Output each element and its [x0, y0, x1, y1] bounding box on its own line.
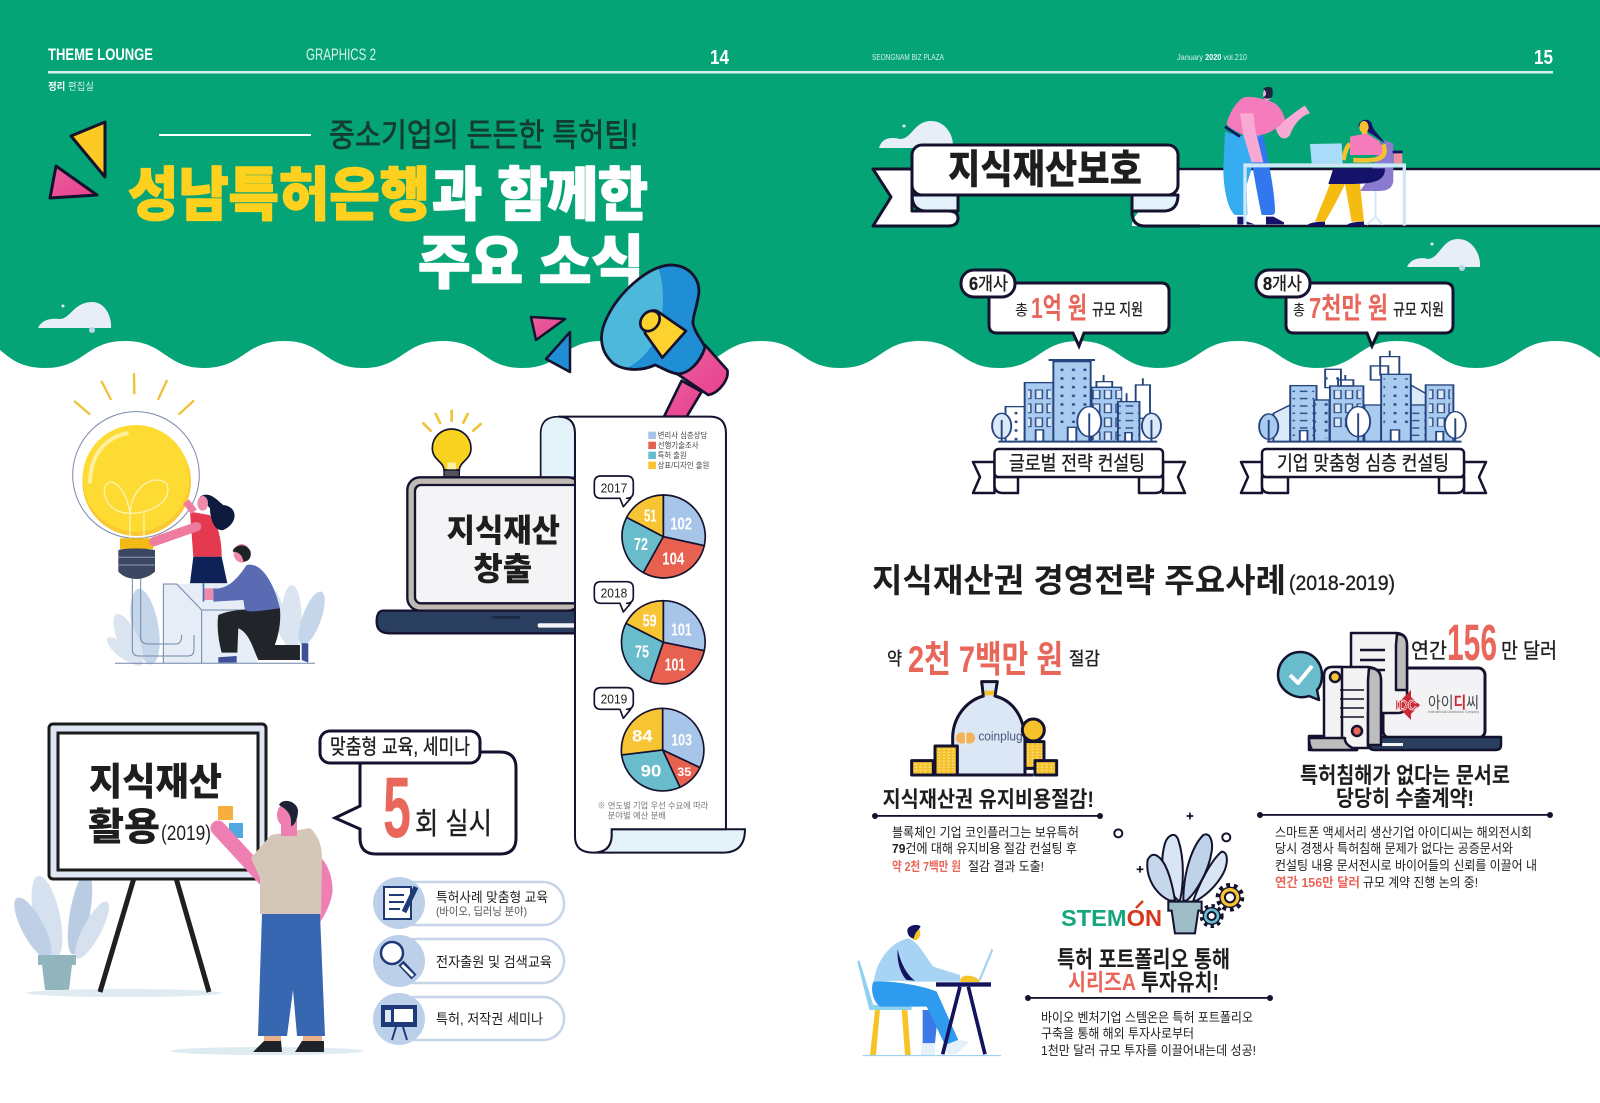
- export value headline: [1411, 614, 1557, 671]
- page header bar: 15: [1534, 47, 1553, 69]
- illustration: two people at desk: [1223, 87, 1406, 226]
- support callout: 6 companies: 규모 지원: [1092, 301, 1143, 319]
- case title: 당당히 수출계약!: [1336, 786, 1474, 811]
- ribbon: IP protection: 지식재산보호: [948, 148, 1142, 192]
- case body: 당시 경쟁사 특허침해 문제가 없다는 공증문서와: [1275, 841, 1513, 856]
- pie chart 2018: 59: [643, 611, 657, 631]
- case body: 구축을 통해 해외 투자사로부터: [1041, 1026, 1194, 1041]
- title: 성남특허은행: [128, 163, 430, 228]
- callout: five sessions: 회 실시: [415, 808, 492, 841]
- ribbon: global strategy consulting: [973, 449, 1185, 493]
- IDC logo: 아이디씨: [1428, 694, 1479, 712]
- export value headline: 연간: [1411, 640, 1447, 663]
- cloud middle right: [1407, 239, 1480, 271]
- pie chart 2017: 2017: [601, 480, 627, 495]
- pie chart 2018: 2018: [601, 586, 627, 601]
- support callout: 8 companies: 7천만 원: [1309, 292, 1388, 325]
- divider: [872, 813, 1103, 819]
- section heading: key cases: 지식재산권 경영전략 주요사례: [872, 562, 1286, 599]
- savings headline: 절감: [1069, 649, 1100, 669]
- case title: [1300, 763, 1510, 811]
- icon: coin jar: [912, 682, 1057, 775]
- case title: 시리즈A: [1068, 969, 1136, 995]
- easel: [100, 878, 209, 992]
- panel: knowledge creation laptop and pie charts: [377, 411, 745, 853]
- case body: 1천만 달러 규모 투자를 이끌어내는데 성공!: [1041, 1043, 1256, 1058]
- case title: 특허침해가 없다는 문서로: [1300, 763, 1510, 788]
- cloud top right: [879, 121, 953, 148]
- ribbon: IP protection: [873, 145, 1600, 226]
- whiteboard text: 지식재산: [89, 762, 222, 804]
- panel: knowledge utilisation whiteboard: [7, 724, 564, 1055]
- pill: seminar: 특허, 저작권 세미나: [436, 1011, 543, 1027]
- case body: 절감 결과 도출!: [968, 859, 1044, 874]
- bulb rays: [75, 374, 193, 414]
- title: 중소기업의 든든한 특허팀!: [329, 117, 638, 153]
- chart legend: 상표/디자인 출원: [658, 460, 709, 470]
- case body: 79건에 대해 유지비용 절감 컨설팅 후: [892, 841, 1077, 856]
- whiteboard text: (2019): [161, 822, 211, 845]
- pie chart 2017: [594, 476, 705, 578]
- icon: documents and laptop: [1278, 633, 1501, 750]
- pill: e-filing education: 전자출원 및 검색교육: [436, 954, 552, 970]
- case body: 컨설팅 내용 문서전시로 바이어들의 신뢰를 이끌어 내: [1275, 858, 1537, 873]
- pie chart 2018: [594, 582, 705, 684]
- case body: [1275, 825, 1537, 890]
- green header background: [0, 0, 1600, 368]
- page header bar: January 2020 vol.210: [1177, 52, 1247, 62]
- pill: seminar: [373, 993, 564, 1045]
- case title: 지식재산권 유지비용절감!: [882, 787, 1094, 812]
- pill: custom education: (바이오, 딥러닝 분야): [436, 905, 527, 918]
- title: 주요 소식: [418, 231, 644, 296]
- support callout: 6 companies: 1억 원: [1031, 292, 1087, 325]
- page header bar: SEONGNAM BIZ PLAZA: [872, 53, 945, 62]
- STEMON logo: STEMON: [1061, 905, 1162, 931]
- case body: [892, 825, 1079, 874]
- title decoration triangles: [50, 122, 105, 198]
- chart footnote: 분야별 예산 분배: [608, 811, 666, 821]
- support callout: 8 companies: [1256, 270, 1453, 346]
- case body: 약 2천 7백만 원: [892, 859, 961, 874]
- icon: coin jar: coinplug: [978, 729, 1023, 744]
- title: [128, 117, 648, 296]
- callout: five sessions: 5: [383, 760, 411, 856]
- section heading: key cases: (2018-2019): [1289, 572, 1395, 595]
- pill: e-filing education: [373, 935, 564, 987]
- pie chart 2019: 35: [677, 765, 692, 779]
- savings headline: 2천 7백만 원: [908, 639, 1063, 680]
- export value headline: 156: [1447, 614, 1497, 671]
- case body: 블록체인 기업 코인플러그는 보유특허: [892, 825, 1079, 840]
- support callout: 6 companies: 6개사: [969, 274, 1008, 294]
- pie chart 2018: 75: [635, 641, 649, 661]
- case title: [1057, 946, 1230, 995]
- page header bar: 정리 편집실: [48, 81, 94, 93]
- presenter figure: [218, 801, 332, 1052]
- laptop text: 창출: [473, 551, 532, 587]
- case: coinplug: [872, 639, 1103, 874]
- pill: custom education: 특허사례 맞춤형 교육: [436, 890, 548, 905]
- chart legend: 선행기술조사: [658, 440, 699, 450]
- ribbon: tailored consulting: 기업 맞춤형 심층 컨설팅: [1277, 452, 1449, 475]
- chart legend: 변리사 심층상담: [658, 430, 708, 440]
- support callout: 8 companies: 8개사: [1263, 274, 1302, 294]
- page header bar: THEME LOUNGE: [48, 45, 153, 64]
- pie chart 2019: 103: [671, 731, 692, 750]
- support callout: 8 companies: 규모 지원: [1393, 301, 1444, 319]
- case body: 연간 156만 달러: [1275, 875, 1360, 890]
- icon: small bulb: [423, 411, 481, 478]
- man standing: [1223, 87, 1310, 224]
- chart legend: [648, 430, 709, 470]
- support callout: 8 companies: 총: [1293, 302, 1305, 319]
- plant: [7, 870, 115, 990]
- pill: custom education: [373, 877, 564, 929]
- laptop text: 지식재산: [447, 513, 560, 549]
- case title: 투자유치!: [1141, 969, 1219, 995]
- ribbon: tailored consulting: [1241, 449, 1486, 493]
- divider: [1025, 995, 1273, 1001]
- page header bar: 14: [710, 47, 730, 69]
- callout: five sessions: [320, 731, 516, 856]
- support callout: 6 companies: [961, 270, 1169, 346]
- divider: [1257, 812, 1553, 818]
- icon: city buildings left: [992, 360, 1161, 442]
- illustration: man working at laptop: [857, 925, 1001, 1056]
- IDC logo: [1395, 690, 1479, 720]
- pie chart 2017: 104: [662, 548, 685, 568]
- case: STEMON: [1025, 813, 1273, 1058]
- case body: 스마트폰 액세서리 생산기업 아이디씨는 해외전시회: [1275, 825, 1532, 840]
- chart legend: 특허 출원: [658, 450, 687, 460]
- IDC logo: IDC: [1395, 697, 1417, 714]
- pie chart 2019: [594, 688, 704, 791]
- page header bar: GRAPHICS 2: [306, 45, 376, 64]
- pie chart 2018: 101: [671, 620, 692, 640]
- whiteboard text: 활용: [88, 807, 160, 849]
- IDC logo: International Distribution Company: [1428, 709, 1479, 714]
- chart footnote: ※ 연도별 기업 우선 수요에 따라: [597, 801, 709, 811]
- cloud left: [38, 302, 111, 333]
- callout: five sessions: 맞춤형 교육, 세미나: [330, 736, 470, 759]
- case body: [1041, 1010, 1256, 1058]
- small triangles beside megaphone: [531, 317, 570, 372]
- support callout: 6 companies: 총: [1015, 302, 1028, 319]
- pie chart 2018: 101: [665, 655, 686, 675]
- icon: city buildings right: [1259, 351, 1466, 442]
- title: 과 함께한: [432, 163, 648, 228]
- icon: plant with gears: [1114, 813, 1241, 933]
- whiteboard text: [88, 762, 222, 849]
- laptop text: [447, 513, 560, 587]
- paper scroll: [558, 417, 745, 853]
- pie chart 2017: 102: [670, 513, 692, 533]
- chart footnote: [597, 801, 709, 821]
- laptop: [377, 417, 583, 633]
- pie chart 2019: 90: [641, 762, 661, 781]
- export value headline: 만 달러: [1501, 640, 1557, 663]
- illustration: light bulb with two people: [73, 374, 330, 670]
- case body: 바이오 벤처기업 스템온은 특허 포트폴리오: [1041, 1010, 1253, 1025]
- case: IDC: [1257, 614, 1557, 890]
- case body: 규모 계약 진행 논의 중!: [1363, 875, 1478, 890]
- savings headline: 약: [887, 649, 902, 669]
- woman seated: [1307, 120, 1403, 226]
- pie chart 2019: 84: [632, 726, 653, 745]
- case title: 특허 포트폴리오 통해: [1057, 946, 1230, 972]
- ribbon: global strategy consulting: 글로벌 전략 컨설팅: [1009, 452, 1145, 475]
- pie chart 2017: 51: [644, 505, 657, 525]
- page header bar: [48, 45, 1553, 93]
- pie chart 2019: 2019: [601, 692, 627, 707]
- pie chart 2017: 72: [634, 534, 648, 554]
- megaphone icon: [602, 265, 728, 417]
